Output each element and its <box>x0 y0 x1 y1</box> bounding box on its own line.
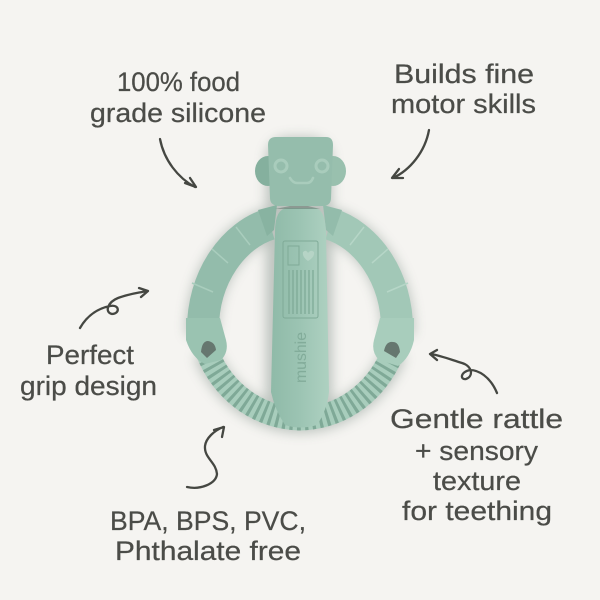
arrow: fine motor <box>392 130 429 178</box>
label: fine motor <box>391 59 536 119</box>
right ear <box>320 156 346 186</box>
left ear <box>255 156 281 186</box>
label: grip <box>20 340 157 401</box>
label: grip: Perfect <box>46 340 135 370</box>
label: rattle: texture <box>433 466 521 496</box>
flag emboss <box>283 241 318 318</box>
arrow: grip <box>80 288 148 328</box>
head <box>268 137 333 206</box>
eyes <box>275 160 328 172</box>
label: rattle: + sensory <box>415 436 539 466</box>
right arm <box>323 205 414 366</box>
label: rattle <box>390 404 563 526</box>
label: rattle: for teething <box>402 496 552 526</box>
label: fine motor: motor skills <box>391 89 536 119</box>
torso <box>271 208 329 428</box>
label: fine motor: Builds fine <box>394 59 534 89</box>
arrow: rattle <box>430 350 497 393</box>
label: food grade: 100% food <box>117 67 240 97</box>
label: grip: grip design <box>20 371 157 401</box>
neck shadow <box>275 204 320 209</box>
arrow: food grade <box>160 139 196 187</box>
smile <box>290 178 313 183</box>
brand: mushie <box>293 332 310 383</box>
label: free of: Phthalate free <box>115 536 301 566</box>
left arm <box>186 205 277 364</box>
label: free of <box>110 506 306 566</box>
ribbed lower ring <box>207 352 393 419</box>
label: food grade: grade silicone <box>90 98 266 128</box>
label: free of: BPA, BPS, PVC, <box>110 506 306 536</box>
shadow <box>202 137 398 427</box>
arrow: free of <box>187 427 224 488</box>
label: rattle: Gentle rattle <box>390 404 563 434</box>
label: food grade <box>90 67 266 128</box>
teether robot <box>186 137 414 428</box>
